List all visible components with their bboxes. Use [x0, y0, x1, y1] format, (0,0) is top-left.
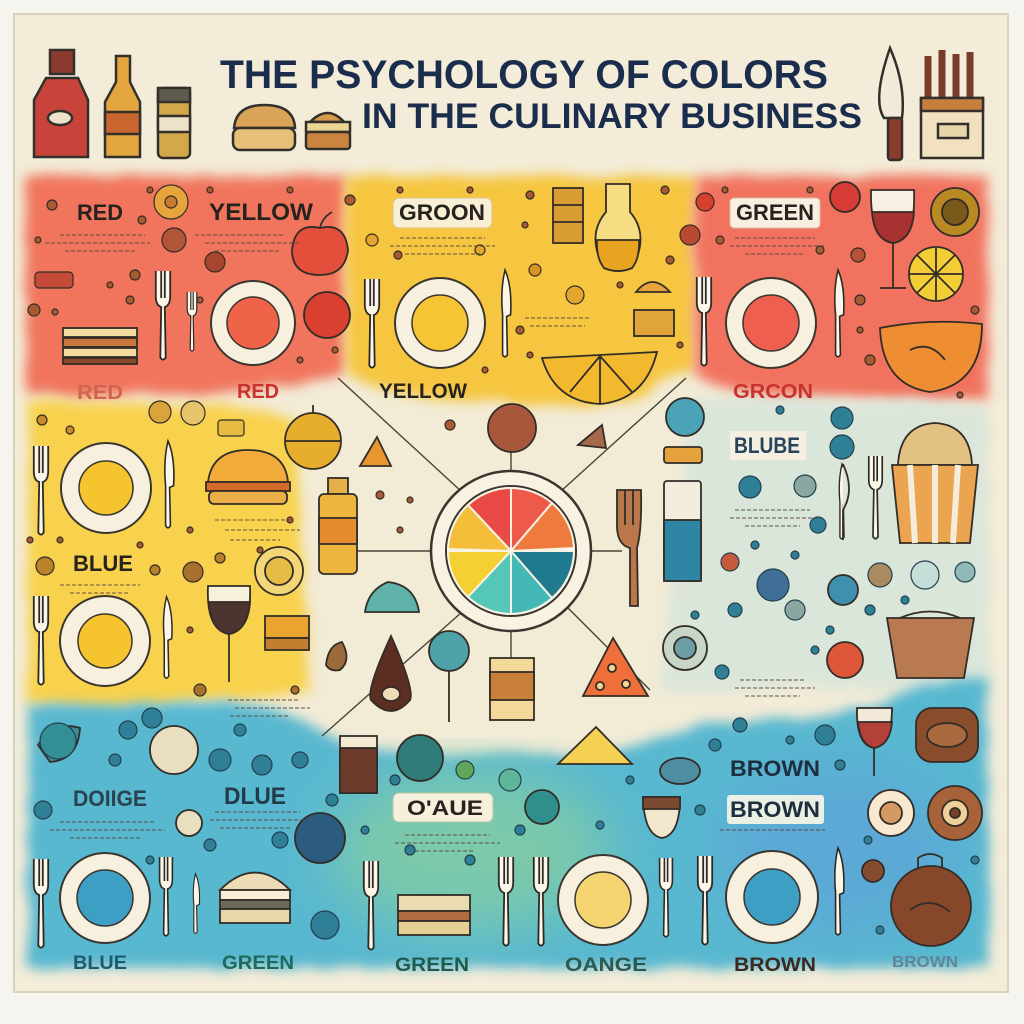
wheel: red slices: [468, 488, 552, 551]
label: blue right: BLUBE: [734, 433, 800, 458]
icon: green ball: [525, 790, 559, 824]
label: yellow below plate: YELLOW: [379, 380, 467, 403]
icon: stacked sandwich: [306, 113, 350, 149]
icon: burger bottom: [220, 872, 290, 923]
icon: bread: [233, 105, 295, 150]
icon: teal ball top: [666, 398, 704, 436]
label: yellow: YELLOW: [209, 199, 313, 226]
label: blue left: BLUE: [73, 551, 133, 576]
center color wheel: [431, 471, 591, 631]
icon: pizza slice: [583, 638, 648, 696]
icon: utensil box: [921, 50, 983, 158]
label: groon: [393, 198, 492, 228]
icon: cheese wedge: [558, 727, 632, 764]
connector lines from wheel: [320, 378, 686, 736]
label: dlue: DLUE: [224, 783, 286, 810]
colored background zones: [25, 172, 990, 972]
plate: cream bottom: [558, 855, 648, 945]
food icons: [38, 182, 982, 946]
plate: red top left: [211, 281, 295, 365]
icon: cheese slice: [360, 437, 391, 466]
icon: cup: [643, 797, 680, 838]
wheel: orange slice: [511, 503, 574, 551]
icon: orange bowl: [880, 322, 982, 392]
section labels: [73, 198, 958, 976]
plates, forks and knives: [34, 270, 882, 950]
icon: brown chip: [578, 425, 606, 448]
plate: blue bottom right: [726, 851, 818, 943]
label: brown faded: BROWN: [892, 954, 958, 971]
icon: red sauce bottle: [34, 50, 88, 157]
text placeholder lines: [45, 235, 825, 851]
scattered food doodles: [27, 185, 979, 696]
icon: blue glass: [664, 481, 701, 581]
plate: red top right: [726, 278, 816, 368]
label: green bottom: GREEN: [222, 953, 294, 974]
plate: yellow left lower: [60, 596, 150, 686]
scattered blue doodles: [34, 406, 979, 939]
label: oaue: [393, 793, 493, 822]
icon: brown ring: [928, 786, 982, 840]
icon: brown round: [488, 404, 536, 452]
label: red: RED: [77, 200, 123, 225]
label: red below plate: RED: [237, 381, 279, 403]
cutlery set: [34, 270, 882, 950]
icon: brown pot: [891, 854, 971, 946]
icon: small brown ball: [862, 860, 884, 882]
icon: wine glass left: [208, 586, 250, 682]
icon: burger: [206, 450, 290, 504]
icon: blue dome: [295, 813, 345, 863]
icon: peach round: [150, 726, 198, 774]
icon: center fork: [617, 490, 641, 606]
title: IN THE CULINARY BUSINESS: [362, 97, 862, 136]
icon: lemon slice: [909, 247, 963, 301]
label: brown bottom: BROWN: [734, 955, 816, 976]
icon: brown basket: [887, 612, 974, 678]
icon: cake bottom: [398, 895, 470, 935]
icon: sandwich: [634, 282, 674, 336]
icon: recipe box: [553, 188, 583, 243]
icon: gold coin: [255, 547, 303, 595]
plate: yellow top: [395, 278, 485, 368]
label: brown boxed: BROWN: [730, 797, 820, 822]
label: green bottom center: GREEN: [395, 955, 469, 976]
icon: wine glass: [871, 190, 914, 288]
icon: red ball: [830, 182, 860, 212]
wheel: yellow slices: [448, 505, 511, 597]
icon: toast center: [490, 658, 534, 720]
icon: popcorn bucket: [892, 423, 978, 543]
icon: flask: [595, 184, 641, 271]
header icons: [34, 48, 983, 160]
icon: jar: [158, 88, 190, 158]
icon: teal ball right: [828, 575, 858, 605]
icon: yellow bottle: [105, 56, 140, 157]
title: THE PSYCHOLOGY OF COLORS: [220, 53, 828, 97]
icon: wine right: [857, 708, 892, 776]
icon: yellow wedge bowl: [542, 352, 657, 404]
icon: teal bowl left: [38, 726, 80, 762]
icon: stacked tray: [63, 328, 137, 364]
icon: teal mound: [365, 582, 419, 612]
label: groon: GROON: [399, 200, 485, 225]
icon: cream plate: [868, 790, 914, 836]
icon: chef knife: [879, 48, 903, 160]
icon: teal blob: [660, 758, 700, 784]
icon: brown bar: [664, 447, 702, 463]
icon: yellow bottle middle: [319, 478, 357, 574]
icon: small apple: [304, 292, 350, 338]
icon: toast left: [265, 616, 309, 650]
icon: brown block: [916, 708, 978, 762]
label: oaue: O'AUE: [407, 797, 483, 820]
icon: red apple: [292, 212, 348, 275]
icon: coffee glass: [340, 736, 377, 793]
icon: brown nut: [326, 642, 347, 670]
icon: red ball right: [827, 642, 863, 678]
title: [220, 53, 862, 136]
label: doiige: DOIIGE: [73, 786, 147, 811]
icon: teal leaf: [397, 735, 443, 781]
label: orange bottom: OANGE: [565, 955, 647, 976]
icon: ring right: [663, 626, 707, 670]
plate: blue bottom left: [60, 853, 150, 943]
icon: teal lollipop: [429, 631, 469, 722]
label: red faded: RED: [77, 382, 123, 404]
label: green: GREEN: [736, 200, 814, 225]
icon: brown drop: [370, 636, 411, 711]
label: grcon: GRCON: [733, 381, 813, 403]
wheel: teal slices: [468, 551, 574, 614]
plate: yellow left upper: [61, 443, 151, 533]
label: brown upper: BROWN: [730, 756, 820, 781]
label: blue bottom: BLUE: [73, 953, 127, 974]
icon: gold disc: [931, 188, 979, 236]
icon: spoon right: [843, 464, 849, 540]
icon: smiley: [176, 810, 202, 836]
icon: round pot: [285, 405, 341, 469]
